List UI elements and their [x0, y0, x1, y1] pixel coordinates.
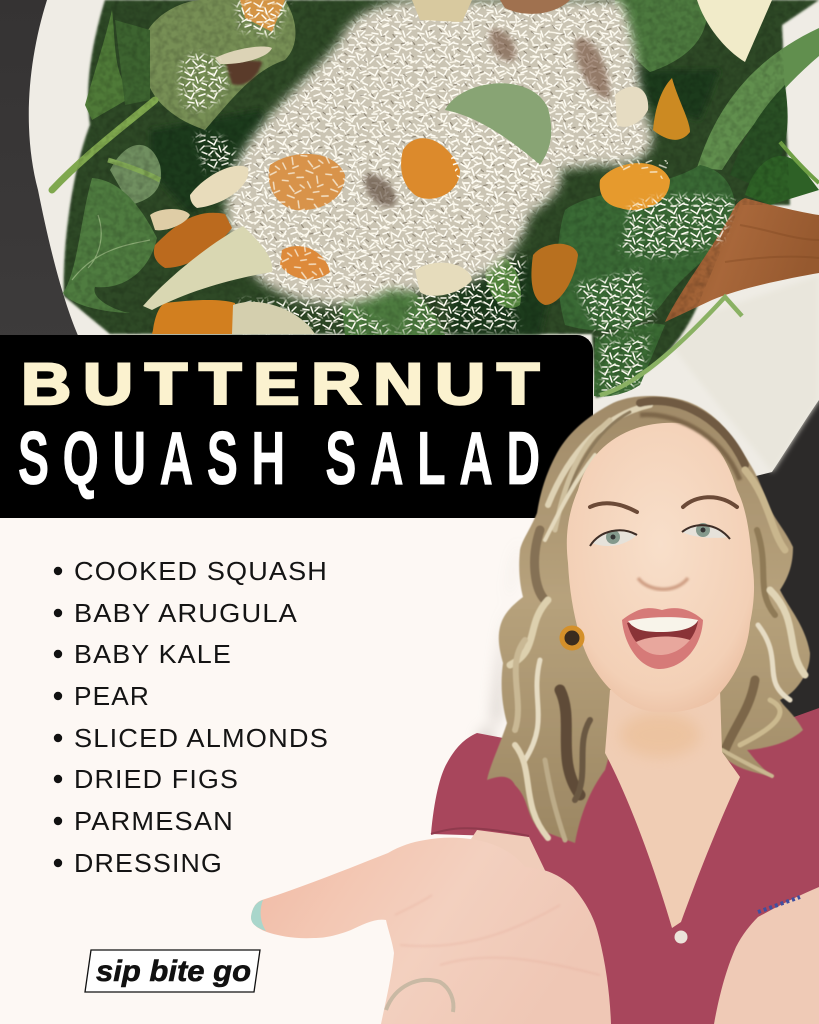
dried figs and almonds in pile [365, 29, 610, 207]
almond: top [500, 0, 570, 14]
white bowl [29, 0, 819, 480]
ring [386, 980, 453, 1012]
palm creases [395, 895, 600, 975]
leaf: right dark [730, 85, 788, 190]
salad base [64, 0, 819, 398]
hair back [487, 396, 810, 843]
dark leaf shadows [150, 70, 720, 335]
forearm [465, 830, 552, 885]
leaf: top right [614, 0, 707, 72]
nose [638, 578, 688, 589]
soft halo around hair [478, 540, 520, 770]
leaf: center pale [445, 83, 551, 165]
logo text: sip bite go [96, 955, 251, 988]
leaf: far left [85, 10, 135, 120]
right eye [682, 523, 730, 539]
leaf: upper right [697, 28, 819, 170]
item: dried figs: DRIED FIGS [74, 766, 239, 794]
spoon grain [725, 225, 819, 262]
neck and chest [605, 690, 740, 928]
leaf: bottom center [340, 277, 445, 335]
shirt button [674, 930, 688, 944]
bracelet [758, 897, 800, 912]
stem: lower right [600, 297, 742, 395]
mouth interior [627, 617, 698, 654]
stem: left [52, 100, 155, 190]
left eye [590, 530, 637, 546]
item: pear: PEAR [74, 683, 150, 711]
bowl lower shade [660, 275, 819, 472]
stem: right [780, 142, 819, 183]
leaf: left kale [63, 178, 157, 313]
earring [562, 628, 582, 648]
tongue [636, 636, 690, 655]
title line 2: SQUASH SALAD [18, 418, 540, 501]
shirt [431, 708, 819, 1024]
outstretched hand [251, 838, 611, 1024]
left eyebrow [590, 503, 637, 512]
woman [251, 396, 819, 1024]
title line 1: BUTTERNUT [21, 351, 539, 417]
leaf texture [64, 0, 819, 400]
wooden spoon [665, 198, 819, 322]
mouth [622, 608, 703, 669]
leaf: right lower [745, 156, 819, 205]
teeth [628, 617, 698, 632]
neck shadow [620, 713, 700, 757]
item: dressing: DRESSING [74, 850, 223, 878]
face [567, 423, 754, 712]
fingernail [251, 900, 266, 931]
leaf: center small [365, 79, 413, 130]
hairline shadow [640, 415, 740, 480]
leaf: small center right [485, 254, 521, 308]
shaved parmesan pile [218, 0, 660, 312]
stem: short [108, 160, 160, 180]
almond and fig on leaf [215, 46, 272, 85]
lips [622, 608, 703, 669]
item: baby kale: BABY KALE [74, 641, 232, 669]
pears and almonds [143, 0, 772, 334]
sleeve hem [431, 828, 529, 836]
dark table right [700, 345, 819, 730]
right eyebrow [683, 497, 737, 507]
parmesan over leaves [170, 0, 750, 400]
black title box [0, 335, 593, 518]
leaf: small pale left [110, 145, 161, 205]
hair strands [510, 401, 805, 840]
parmesan over squash [268, 150, 668, 285]
parmesan over pale leaf [448, 118, 548, 201]
leaf: lower right kale [558, 165, 735, 331]
leaf: behind far left [115, 20, 150, 105]
squash pieces [152, 0, 690, 334]
item: sliced almonds: SLICED ALMONDS [74, 725, 329, 753]
salad photo [0, 0, 819, 730]
leaf: upper left large [145, 0, 296, 130]
title panel [0, 335, 593, 518]
item: cooked squash: COOKED SQUASH [74, 558, 328, 586]
right hand [714, 887, 819, 1024]
logo: sip bite go [85, 950, 260, 992]
item: parmesan: PARMESAN [74, 808, 234, 836]
logo frame [85, 950, 260, 992]
kale veins [72, 215, 150, 280]
item: baby arugula: BABY ARUGULA [74, 600, 298, 628]
ingredient list [54, 558, 329, 878]
leaf: bottom right [594, 323, 665, 397]
dark table left [0, 0, 120, 345]
